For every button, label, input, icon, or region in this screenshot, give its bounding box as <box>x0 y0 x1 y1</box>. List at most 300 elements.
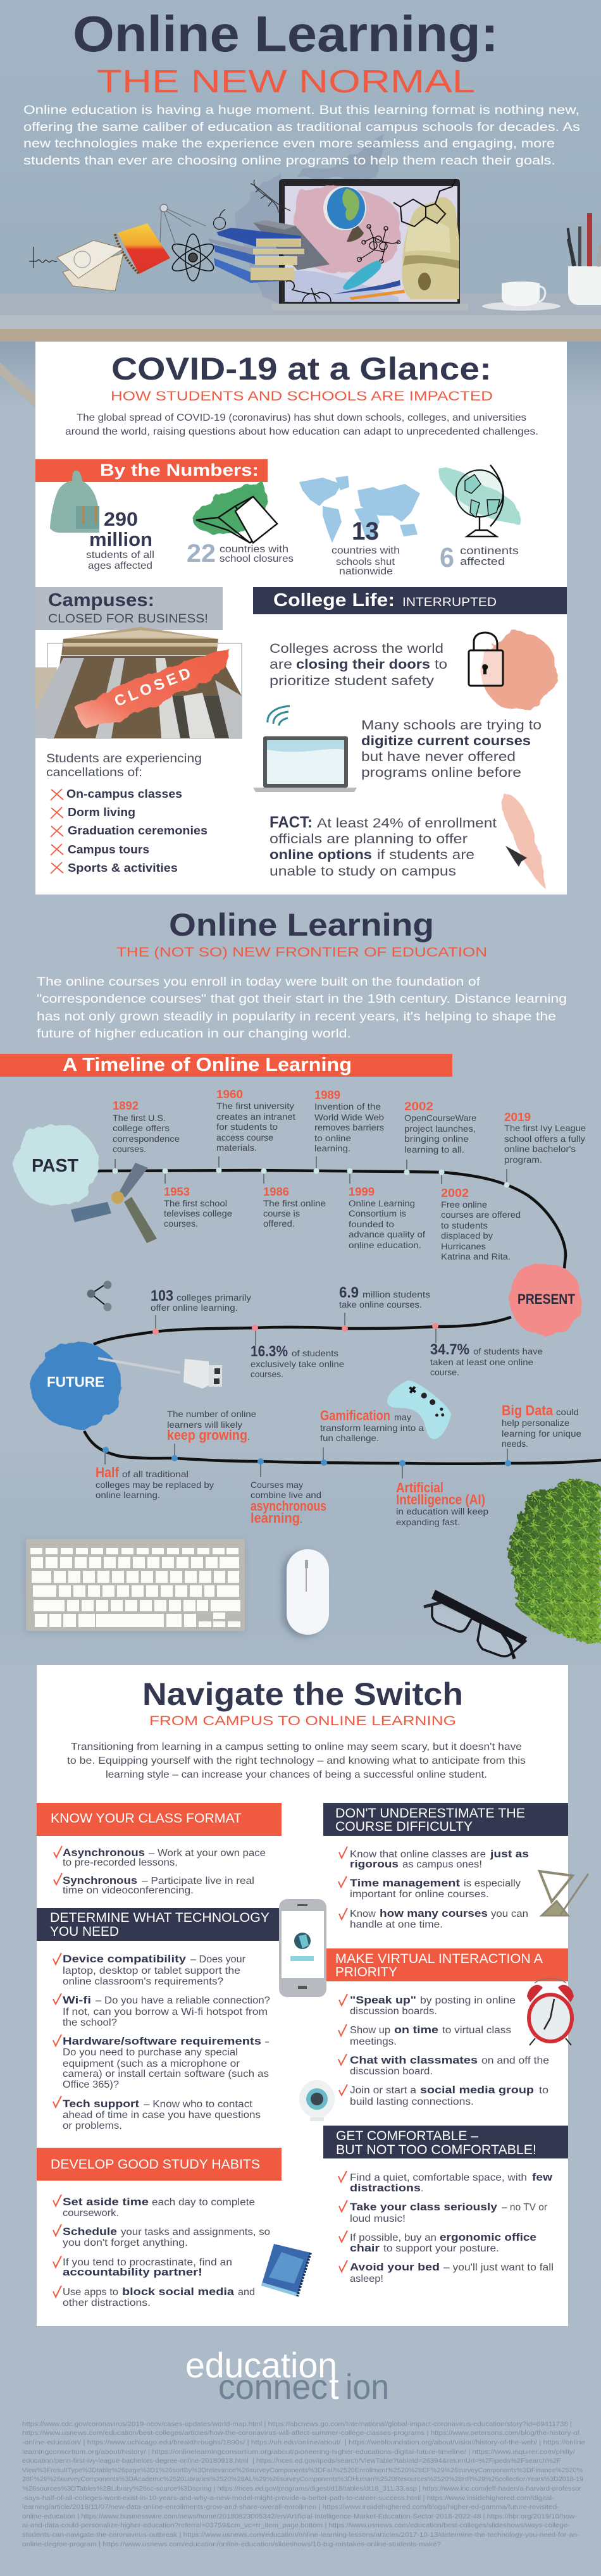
text: digitize current courses: Many schools are trying to <box>361 717 542 733</box>
future: half of colleges: online learning. <box>96 1490 160 1500</box>
list: technology: – Know who to contact <box>144 2099 253 2110</box>
timeline entry 1986: 1986 <box>263 1186 289 1198</box>
marker, pen and pencil <box>332 261 405 300</box>
timeline entry 1989: World Wide Web <box>314 1112 384 1122</box>
list: technology: – Do you have a reliable connection? <box>96 1995 270 2006</box>
backpack <box>402 197 459 299</box>
list: technology: ahead of time in case you have questions <box>63 2110 261 2121</box>
past node <box>15 1124 98 1206</box>
text: closing their doors <box>270 641 447 688</box>
list: get comfortable: – no TV or <box>502 2202 547 2213</box>
timeline entry 1892: college offers <box>113 1123 170 1133</box>
list: study habits: Set aside time <box>63 2196 149 2208</box>
list: get comfortable: distractions <box>350 2182 421 2194</box>
stat: 16.3 percent: courses. <box>251 1369 283 1379</box>
timeline entry 2002 hurricanes: to students <box>441 1220 488 1230</box>
list: virtual interaction: on time <box>394 2024 438 2036</box>
timeline entry 1989: learning. <box>314 1143 350 1153</box>
list: virtual interaction: by posting in online <box>420 1995 516 2006</box>
hero intro text: Online education is having a huge moment. But this learning format is nothing new, <box>23 104 579 117</box>
timeline entry 1960: The first university <box>216 1101 294 1111</box>
list: virtual interaction: to virtual class <box>442 2025 511 2036</box>
timeline path <box>84 1156 601 1478</box>
future: asynchronous learning <box>251 1480 326 1526</box>
sources text: online-degree-program | https://www.usnews.com/education/online-education/slideshows/10-big-mistakes-online-students-make? <box>22 2541 441 2548</box>
stat: 13 countries <box>331 517 400 577</box>
timeline entry 1989: removes barriers <box>314 1122 384 1132</box>
icon: alarm clock <box>527 1979 574 2045</box>
list: study habits: you don't forget anything. <box>63 2238 188 2248</box>
future: keep growing: keep growing <box>167 1427 247 1443</box>
future: asynchronous learning: asynchronous <box>251 1498 326 1514</box>
timeline entry 2002 hurricanes: displaced by <box>441 1230 493 1241</box>
timeline entry 1960: 1960 <box>216 1088 243 1101</box>
icon: blue notebook <box>261 2244 311 2296</box>
list: get comfortable <box>338 2171 554 2284</box>
stat: 16.3 percent: of students <box>292 1348 338 1358</box>
sources text: ai-and-data-could-personalize-higher-education?referral=03759&cm_vc=rr_item_page.bottom | https://www.usnews.com/education/best-colleges/slideshows/ways-college- <box>22 2522 571 2529</box>
list: virtual interaction <box>338 1994 549 2107</box>
icon: satellite <box>71 1163 157 1243</box>
list: virtual interaction: discussion boards. <box>350 2006 437 2017</box>
list: virtual interaction: discussion board. <box>350 2066 433 2077</box>
intro text: to be. Equipping yourself with the right technology – and knowing what to anticipate from this <box>67 1756 526 1766</box>
hero illustration: flying school objects and laptop <box>29 136 601 311</box>
future: big data: needs. <box>502 1439 528 1449</box>
future: artificial intelligence: Intelligence (AI) <box>396 1492 485 1508</box>
stat: 6 continents <box>440 542 519 573</box>
list: technology: equipment (such as a microphone or <box>63 2059 240 2069</box>
list: technology: camera) or install certain software (such as <box>63 2069 269 2079</box>
section intro text: has not only grown steadily in popularity in recent years, it's helping to shape the <box>37 1010 556 1024</box>
list: get comfortable: chair <box>350 2242 380 2254</box>
list: get comfortable: few <box>532 2171 553 2183</box>
icon: plant <box>508 1478 601 1643</box>
future: artificial intelligence: in education will keep <box>396 1506 488 1516</box>
text: fact <box>270 814 497 879</box>
text: fact: if students are <box>377 847 474 862</box>
hero intro text <box>23 104 580 168</box>
heading: Navigate the Switch <box>142 1676 463 1712</box>
list: course difficulty: important for online courses. <box>350 1889 489 1900</box>
timeline entry 2002 OpenCourseWare: OpenCourseWare <box>404 1113 476 1123</box>
list: course difficulty: Know <box>350 1909 376 1919</box>
list: study habits: coursework. <box>63 2208 119 2219</box>
laptop <box>272 179 468 311</box>
timeline entry 1953: 1953 <box>164 1186 190 1198</box>
future: gamification: transform learning into a <box>320 1423 424 1433</box>
stat: 34.7 percent: taken at least one online <box>430 1357 533 1367</box>
future: asynchronous learning: Courses may <box>251 1480 303 1490</box>
timeline entry 1999: 1999 <box>349 1186 375 1198</box>
hero intro text: students than ever are choosing online programs to help them reach their goals. <box>23 154 555 168</box>
future: artificial intelligence <box>396 1480 488 1527</box>
stat: 16.3 percent <box>251 1343 344 1379</box>
future: big data: learning for unique <box>502 1428 581 1439</box>
future: big data: help personalize <box>502 1418 569 1428</box>
list: virtual interaction: Show up <box>350 2025 390 2036</box>
timeline entry 2002 OpenCourseWare: bringing online <box>404 1134 469 1144</box>
timeline banner: A Timeline of Online Learning <box>63 1053 352 1075</box>
stat: 22 countries: countries with <box>220 544 288 555</box>
stat: 13 countries: nationwide <box>339 566 393 577</box>
stat: 34.7 percent: course. <box>430 1367 459 1377</box>
sources text: online-education | https://www.businesswire.com/news/home/20180823005342/en/Artificial-Intelligence-Market-Education-Sector-2018-2022-48 | https://hbr.org/2019/10/how- <box>22 2513 578 2520</box>
list: course difficulty: Know that online classes are <box>350 1849 486 1860</box>
list: technology: Wi-fi <box>63 1994 91 2006</box>
timeline entry 2019: The first Ivy League <box>504 1123 586 1133</box>
campuses heading: Campuses: <box>48 590 154 610</box>
list: technology: the school? <box>63 2017 117 2028</box>
timeline entry 1989: Invention of the <box>314 1101 381 1112</box>
header: determine technology: YOU NEED <box>50 1924 119 1939</box>
timeline entry 1999: online education. <box>349 1240 421 1250</box>
sources text: education/penn-first-ivy-league-bachelors-degree-online-20180918.html | https://nces.ed.gov/ipeds/search/ViewTable?tableId=26394&returnUrl=%2Fipeds%2Fsearch%2F <box>22 2457 561 2465</box>
timeline entry 1960: for students to <box>216 1122 278 1132</box>
text: fact: officials are planning to offer <box>270 831 468 846</box>
hero intro text: new technologies make the experience even more seamless and engaging, more <box>23 137 555 151</box>
timeline entry 1960: access course <box>216 1132 273 1142</box>
list: technology: online classroom's requirements? <box>63 1976 223 1987</box>
future: big data <box>502 1403 581 1449</box>
logo: education connection: connec <box>218 2367 328 2406</box>
list: get comfortable: ergonomic office <box>440 2231 536 2243</box>
timeline entry 2002 hurricanes: courses are offered <box>441 1210 521 1220</box>
campus building photo <box>35 627 242 738</box>
stat: 6 continents: continents <box>460 545 519 557</box>
timeline entry 1986: course is <box>263 1208 300 1218</box>
timeline entry 1986: offered. <box>263 1218 295 1229</box>
icon: book on green splash <box>195 481 277 543</box>
stat: 6.9 million: take online courses. <box>339 1299 422 1310</box>
ink splash behind laptop <box>235 136 386 304</box>
stat: 13 countries: 13 <box>352 517 379 545</box>
sketch papers <box>57 240 123 291</box>
stat: 34.7 percent <box>430 1341 543 1377</box>
pen holder <box>567 213 601 305</box>
list: get comfortable: If possible, buy an <box>350 2232 437 2243</box>
college life heading: INTERRUPTED <box>402 596 497 609</box>
list: study habits: your tasks and assignments, so <box>121 2227 270 2238</box>
section intro text: "correspondence courses" that got their start in the 19th century. Distance learning <box>37 993 567 1006</box>
list: virtual interaction: Chat with classmates <box>350 2054 478 2066</box>
list: study habits: and <box>238 2287 255 2298</box>
subheading: FROM CAMPUS TO ONLINE LEARNING <box>149 1714 456 1728</box>
timeline entry 2002 hurricanes: 2002 <box>441 1187 469 1199</box>
header: develop study habits: DEVELOP GOOD STUDY HABITS <box>51 2157 260 2172</box>
stat: 103 colleges: colleges primarily <box>177 1292 251 1303</box>
list: class format <box>54 1846 266 1896</box>
sources text: students-can-navigate-the-coronavirus-outbreak | https://www.usnews.com/education/online-learning-lessons/articles/2017-10-13/determine-the-technology-you-need-for-an- <box>22 2531 580 2539</box>
chemical structure lines <box>393 179 455 226</box>
list: course difficulty: just as <box>490 1848 529 1860</box>
cancellations list: Sports & activities <box>68 862 178 874</box>
stat: 22 countries <box>187 540 294 567</box>
list: get comfortable: – you'll just want to fall <box>443 2262 554 2273</box>
stat: 6.9 million: 6.9 <box>339 1284 359 1301</box>
timeline entry 1892 <box>113 1099 180 1154</box>
logo: education connection: ion <box>345 2367 389 2406</box>
cancellations list: Dorm living <box>68 806 135 819</box>
list: technology: If not, can you borrow a Wi-fi hotspot from <box>63 2007 268 2017</box>
campuses heading <box>35 587 223 630</box>
future: artificial intelligence: expanding fast. <box>396 1517 460 1527</box>
text: digitize current courses: but have never offered <box>361 749 516 764</box>
list: technology: laptop, desktop or tablet support the <box>63 1966 240 1976</box>
header: course difficulty: COURSE DIFFICULTY <box>335 1819 473 1834</box>
stat: 290 million: 290 <box>104 508 138 530</box>
sources text: https://www.usnews.com/education/best-colleges/articles/how-the-coronavirus-will-affect-summer-college-classes-programs | https://www.petersons.com/blog/the-history-of <box>22 2429 579 2437</box>
intro text <box>65 412 538 437</box>
sources text: https://www.cdc.gov/coronavirus/2019-ncov/cases-updates/world-map.html | https://abcnews.go.com/International/global-impact-coronavirus-education/story?id=69411738 | <box>22 2420 572 2428</box>
header: determine technology <box>37 1908 279 1941</box>
scroll sketch <box>286 281 331 302</box>
present node: PRESENT <box>517 1291 575 1307</box>
timeline entry 1953: televises college <box>164 1208 232 1218</box>
stat: 13 countries: schools shut <box>336 557 395 567</box>
timeline entry 1986 <box>263 1186 326 1229</box>
list: course difficulty: handle at one time. <box>350 1919 443 1930</box>
cancellations list: Graduation ceremonies <box>68 824 208 837</box>
timeline entry 1953: The first school <box>164 1198 227 1208</box>
list: get comfortable: Avoid your bed <box>350 2261 440 2273</box>
sources text: View%3FresultType%3Dtable%26page%3D1%26sortBy%3Drelevance%26surveyComponents%3DFall%2520Enrollment%2520%28EF%29%26surveyComponents%3DFinance%2520% <box>22 2467 583 2474</box>
atom <box>169 234 217 281</box>
text: fact: online options <box>270 847 372 862</box>
list: study habits: Schedule <box>63 2226 117 2238</box>
list: get comfortable: Take your class seriously <box>350 2201 498 2213</box>
icon: usb cable <box>98 1358 222 1389</box>
intro text: Transitioning from learning in a campus setting to online may seem scary, but it doesn't have <box>71 1742 522 1752</box>
timeline entry 1892: 1892 <box>113 1099 139 1112</box>
icon: world map <box>299 476 420 543</box>
icon: laptop <box>253 736 357 792</box>
timeline entry 2019: online bachelor's <box>504 1144 576 1154</box>
text: fact: FACT: <box>270 814 313 831</box>
text: fact: At least 24% of enrollment <box>317 815 497 831</box>
list: class format: time on videoconferencing. <box>63 1885 194 1896</box>
timeline entry 2002 OpenCourseWare: learning to all. <box>404 1144 464 1155</box>
panel: COVID-19 at a glance <box>35 342 567 895</box>
red notebook <box>115 223 170 274</box>
sources text: 28F%29%26surveyComponents%3DAcademic%2520Libraries%2520%28AL%29%26surveyComponents%3DHuman%2520Resources%2520%28HR%29%26collectionYears%3D2018-19 <box>22 2475 583 2483</box>
icon: molecule <box>87 1280 111 1311</box>
timeline entry 2002 hurricanes: Katrina and Rita. <box>441 1251 511 1261</box>
by the numbers banner: By the Numbers: <box>100 461 259 480</box>
icon: desk globe <box>439 465 519 536</box>
timeline entry 2002 OpenCourseWare: 2002 <box>404 1100 433 1113</box>
by the numbers banner <box>35 459 268 482</box>
list: class format: – Participate live in real <box>142 1876 254 1886</box>
present node <box>509 1263 582 1335</box>
list: study habits: accountability partner! <box>63 2266 202 2278</box>
future: gamification: fun challenge. <box>320 1433 379 1443</box>
sources text: %26sources%3DTables%2BLibrary%26sc-source%3Dspring | https://nces.ed.gov/programs/digest/d18/tables/dt18_311.33.asp | https://www.inc.com/jeff-haden/a-harvard-professor <box>22 2485 582 2492</box>
cancellations intro <box>46 752 202 779</box>
logo: education connection: education <box>185 2345 337 2385</box>
future: asynchronous learning: combine live and <box>251 1490 321 1500</box>
hero title: Online Learning: <box>73 6 499 62</box>
text: digitize current courses: digitize current courses <box>361 733 531 748</box>
timeline entry 1999: Consortium is <box>349 1208 406 1218</box>
future: big data: could <box>556 1407 579 1417</box>
list: technology: Office 365)? <box>63 2079 119 2090</box>
list: course difficulty: as campus ones! <box>402 1859 482 1870</box>
timeline entry 1999: Online Learning <box>349 1198 415 1208</box>
stat: 13 countries: countries with <box>331 545 400 556</box>
list: course difficulty: you can <box>491 1909 528 1919</box>
intro text: learning style – can increase your chances of being a successful online student. <box>106 1769 487 1780</box>
timeline entry 2019: school offers a fully <box>504 1134 585 1144</box>
list: study habits: If you tend to procrastinate, find an <box>63 2257 232 2268</box>
stat: 103 colleges: 103 <box>151 1287 173 1304</box>
timeline entry 1892: The first U.S. <box>113 1113 166 1123</box>
dna helix <box>251 180 290 213</box>
future: gamification: Gamification <box>320 1408 390 1423</box>
text: closing their doors: are <box>270 657 292 672</box>
icon: paper plane on pink brush <box>502 794 545 889</box>
header: determine technology: DETERMINE WHAT TECHNOLOGY <box>50 1910 270 1925</box>
list: virtual interaction: build lasting connections. <box>350 2096 474 2107</box>
list: course difficulty: Time management <box>350 1877 460 1889</box>
campuses heading: CLOSED FOR BUSINESS! <box>48 612 208 626</box>
list: class format: to pre-recorded lessons. <box>63 1857 178 1868</box>
list: study habits: Use apps to <box>63 2287 118 2298</box>
timeline entry 2002 OpenCourseWare <box>404 1100 476 1155</box>
closed brush banner: CLOSED <box>112 665 193 710</box>
hero intro text: offering the same caliber of education as traditional campus schools for decades. As <box>23 121 580 134</box>
panel: navigate the switch <box>37 1665 588 2326</box>
apple <box>214 209 225 229</box>
list: course difficulty: is especially <box>464 1878 521 1889</box>
timeline entry 2002 hurricanes: Free online <box>441 1199 487 1210</box>
future node: FUTURE <box>47 1374 104 1390</box>
stat: 103 colleges: offer online learning. <box>151 1303 238 1313</box>
section intro text: The online courses you enroll in today were built on the foundation of <box>37 975 481 989</box>
list: study habits: each day to complete <box>152 2197 255 2208</box>
closed brush banner <box>77 648 229 729</box>
header: virtual interaction: MAKE VIRTUAL INTERACTION A <box>335 1952 543 1966</box>
icon: webcam <box>299 2080 335 2121</box>
timeline banner <box>0 1053 452 1077</box>
stat: 290 million: students of all <box>86 550 154 560</box>
section subheading: THE (NOT SO) NEW FRONTIER OF EDUCATION <box>116 945 487 960</box>
icon: backpack <box>50 470 99 533</box>
future: half of colleges: colleges may be replaced by <box>96 1480 214 1490</box>
future: big data: Big Data <box>502 1403 554 1418</box>
timeline entry 2002 hurricanes: Hurricanes <box>441 1241 486 1251</box>
small molecule network <box>357 225 400 263</box>
timeline entry 1986: The first online <box>263 1198 326 1208</box>
list: virtual interaction: on and off the <box>481 2055 549 2066</box>
hero subtitle: THE NEW NORMAL <box>97 63 475 99</box>
header: get comfortable: BUT NOT TOO COMFORTABLE! <box>336 2143 536 2157</box>
stat: 290 million <box>86 508 154 571</box>
future: artificial intelligence: Artificial <box>396 1480 443 1495</box>
sine wave sketch <box>29 247 57 268</box>
logo: education connection <box>185 2345 389 2406</box>
timeline entry 1989: 1989 <box>314 1089 340 1101</box>
timeline entry 1953 <box>164 1186 232 1229</box>
header: course difficulty <box>323 1803 568 1836</box>
list: get comfortable: to support your posture. <box>383 2243 499 2254</box>
cancellations list <box>51 788 208 874</box>
sources text: -online-education/ | https://www.uchicago.edu/breakthroughs/1890s/ | https://uh.edu/online/about/ | https://webfoundation.org/about/vision/history-of-the-web/ | https://online <box>22 2439 585 2446</box>
icon: drafting compass <box>540 1871 588 1916</box>
icon: glasses <box>424 1590 527 1659</box>
list: course difficulty: rigorous <box>350 1858 399 1870</box>
list: study habits: block social media <box>122 2286 235 2298</box>
section intro text <box>37 975 567 1041</box>
text: closing their doors: Colleges across the world <box>270 641 443 656</box>
hero: wall and desk scene <box>0 0 601 408</box>
stat: 34.7 percent: 34.7% <box>430 1341 469 1358</box>
cancellations intro: Students are experiencing <box>46 752 202 765</box>
list: technology: Device compatibility <box>63 1953 187 1965</box>
college life heading <box>253 587 567 614</box>
future: asynchronous learning: . <box>300 1514 302 1525</box>
list: technology: Tech support <box>63 2098 139 2110</box>
text: closing their doors: closing their doors <box>296 657 430 672</box>
future: keep growing <box>167 1409 256 1443</box>
text: digitize current courses <box>361 717 542 780</box>
intro text: around the world, raising questions about how education can adapt to unprecedented challenges. <box>65 426 538 437</box>
coffee cup <box>482 282 561 311</box>
header: know your class format: KNOW YOUR CLASS FORMAT <box>51 1811 242 1826</box>
subheading: HOW STUDENTS AND SCHOOLS ARE IMPACTED <box>111 389 493 404</box>
icon: smartphone <box>279 1899 326 1997</box>
future: gamification: may <box>394 1412 411 1422</box>
timeline entry 1989 <box>314 1089 384 1153</box>
list: class format: – Work at your own pace <box>149 1848 266 1859</box>
timeline entry 1989: to online <box>314 1133 351 1143</box>
stat: 290 million: million <box>89 528 152 550</box>
stat: 34.7 percent: of students have <box>473 1346 543 1356</box>
timeline entry 2019: 2019 <box>504 1111 531 1124</box>
stat: 16.3 percent: 16.3% <box>251 1343 288 1360</box>
list: technology: – Does your <box>190 1954 245 1965</box>
list: technology: Do you need to purchase any special <box>63 2047 238 2058</box>
list: course difficulty: how many courses <box>380 1907 488 1919</box>
icon: wifi <box>268 706 290 726</box>
list: course difficulty <box>338 1847 529 1930</box>
header: get comfortable: GET COMFORTABLE – <box>336 2129 478 2143</box>
timeline entry 2019: program. <box>504 1155 542 1165</box>
header: develop study habits <box>37 2148 282 2181</box>
list: class format: Synchronous <box>63 1874 137 1886</box>
icon: padlock on peach splash <box>469 632 557 710</box>
stat: 22 countries: school closures <box>220 554 294 564</box>
timeline entry 1999: advance quality of <box>349 1229 425 1239</box>
future: half of colleges <box>96 1464 214 1500</box>
college life heading: College Life: <box>273 590 395 610</box>
list: technology <box>53 1953 270 2131</box>
globe <box>323 186 366 242</box>
text: fact: unable to study on campus <box>270 864 456 879</box>
future: keep growing: . <box>247 1432 250 1442</box>
stat: 22 countries: 22 <box>187 540 216 567</box>
timeline entry 2002 OpenCourseWare: project launches, <box>404 1124 476 1134</box>
header: get comfortable <box>323 2126 568 2158</box>
timeline entry 1892: correspondence <box>113 1134 180 1144</box>
future node <box>32 1342 123 1428</box>
sources text: learning/article/2018/11/07/new-data-online-enrollments-grow-and-share-overall-enrollmen | https://www.insidehighered.com/blogs/higher-ed-gamma/future-revisited- <box>22 2503 560 2511</box>
logo: education connection: t <box>329 2367 339 2406</box>
list: virtual interaction: "Speak up" <box>350 1994 416 2006</box>
future: asynchronous learning: learning <box>251 1510 300 1526</box>
list: technology: Hardware/software requirements <box>63 2035 261 2047</box>
timeline entry 1960: creates an intranet <box>216 1112 295 1122</box>
